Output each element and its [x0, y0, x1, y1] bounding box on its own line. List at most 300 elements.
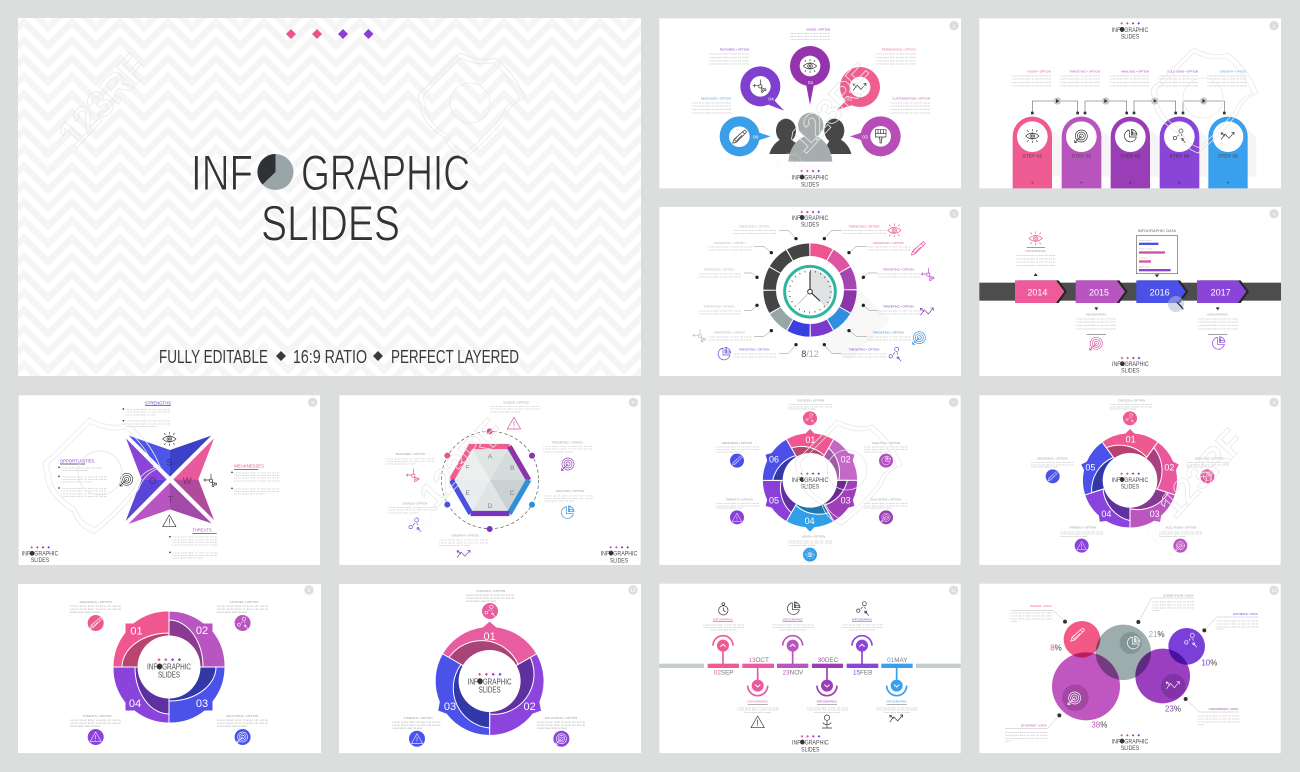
label 2 right: Lorem ipsum dolor sit amet elit sed do — [867, 249, 911, 252]
note 2014: Lorem ipsum dolor sit amet elit sed do — [1016, 261, 1056, 264]
bubble 03: 03 — [862, 134, 868, 140]
tagline: FULLY EDITABLE — [159, 347, 268, 367]
label: vision: Lorem ipsum dolor sit amet elit sed do — [789, 539, 833, 542]
note: top 2: Lorem ipsum dolor sit amet — [779, 628, 806, 631]
hexagon sectors — [448, 444, 532, 516]
label: solutions: SOLUTIONS • OPTION — [1167, 69, 1198, 73]
label: solutions: Lorem ipsum dolor sit amet elit sed do — [217, 719, 269, 722]
label 3 right: Lorem ipsum dolor sit amet elit sed do — [878, 272, 921, 275]
label: pink — [1011, 604, 1053, 623]
label 6 right: TARGETING • OPTION — [849, 348, 879, 352]
label 1 left — [733, 224, 777, 235]
block: weaknesses: Lorem ipsum dolor sit amet elit sed do — [234, 487, 280, 490]
label: choices: Lorem ipsum dolor sit amet elit sed do — [217, 608, 269, 611]
label: analysis: Lorem ipsum dolor sit amet elit sed do — [1186, 463, 1229, 466]
label: vision: VISION • OPTION — [1027, 69, 1051, 73]
label: threats: Lorem ipsum dolor sit amet — [392, 727, 423, 730]
segment numbers: 01 — [805, 435, 815, 445]
label: analysis: Lorem ipsum dolor sit amet elit sed do — [544, 494, 594, 497]
block: strengths: STRENGTHS — [145, 400, 171, 405]
block: strengths: Lorem ipsum dolor sit amet elit sed do — [126, 422, 171, 425]
label: threats: Lorem ipsum dolor sit amet elit sed do — [716, 504, 760, 507]
label: choice left — [388, 501, 437, 532]
percent labels: 23% — [1165, 704, 1181, 713]
page number: 8 — [1273, 400, 1276, 405]
page number: 1 — [953, 23, 956, 28]
segment numbers — [1085, 435, 1174, 519]
pin up 2 — [783, 636, 803, 664]
panel: slide 9 four-part ring — [18, 584, 321, 753]
label 2 left: Lorem ipsum dolor sit amet elit sed do — [708, 246, 752, 249]
icon: pie chart letter O — [257, 154, 294, 190]
page number — [628, 585, 638, 595]
segment numbers — [769, 435, 851, 526]
label: threats — [1060, 526, 1104, 553]
label: designing: Lorem ipsum dolor sit amet — [70, 611, 100, 614]
label: choices: Lorem ipsum dolor sit amet — [217, 611, 247, 614]
ring of six segments — [753, 428, 867, 532]
panel: slide 8 five-part ring — [979, 395, 1281, 565]
mini logo — [792, 735, 829, 753]
bubble 02 — [837, 67, 880, 110]
page number — [629, 398, 638, 407]
mini logo: INFOGRAPHIC — [792, 175, 828, 182]
people icon — [769, 113, 851, 162]
label: growth: GROWTH • OPTION — [1220, 69, 1247, 73]
note 2017 — [1198, 307, 1238, 349]
label: analysis — [864, 441, 908, 468]
label: vision: Lorem ipsum dolor sit amet elit sed do — [1012, 78, 1052, 81]
note 2015: Lorem ipsum dolor sit amet elit sed do — [1077, 317, 1117, 320]
note: bottom 2: INFOGRAPHIC — [817, 700, 837, 704]
label: growth: Lorem ipsum dolor sit amet elit sed do — [439, 539, 489, 542]
bubble 02: 02 — [847, 97, 852, 103]
block: opportunities: Lorem ipsum dolor sit amet elit sed do — [62, 490, 107, 493]
note 2014: INFOGRAPHIC — [1026, 249, 1046, 253]
label: choices: Lorem ipsum dolor sit amet elit sed do — [789, 405, 833, 408]
label: analysis: Lorem ipsum dolor sit amet elit sed do — [1110, 81, 1150, 84]
label: violet: ESTIMATE • DATA — [1233, 612, 1258, 616]
star segment O — [126, 438, 167, 521]
step 01: STEP 01 — [1022, 154, 1042, 160]
tagline — [159, 347, 519, 367]
label: solutions: Lorem ipsum dolor sit amet — [217, 725, 247, 728]
panel: slide 11 date timeline — [659, 584, 961, 753]
label: persevance: Lorem ipsum dolor sit amet elit sed do — [876, 63, 916, 66]
label: designing — [1031, 456, 1074, 483]
mini logo: INFOGRAPHIC — [1112, 27, 1148, 34]
label: magenta: Lorem — [1005, 740, 1012, 743]
note: top 2: INFOGRAPHIC — [783, 617, 803, 621]
label: designing: Lorem ipsum dolor sit amet elit sed do — [1031, 463, 1074, 466]
note: top 1: Lorem ipsum dolor sit amet elit sed do — [703, 624, 745, 627]
label 4 right: Lorem ipsum dolor sit amet elit sed do — [878, 312, 921, 315]
label: pink: Lorem ipsum dolor sit amet elit sed do — [1011, 617, 1053, 620]
label: choices: Lorem ipsum dolor sit amet — [466, 600, 496, 603]
mini logo: INFOGRAPHIC — [792, 215, 828, 222]
label: vision: Lorem ipsum dolor sit amet elit sed do — [790, 38, 831, 41]
label: designing: Lorem ipsum dolor sit amet — [1031, 466, 1058, 469]
block: threats: Lorem ipsum dolor sit amet elit sed do — [173, 536, 218, 539]
step 03 — [1111, 117, 1150, 188]
tagline: 16:9 RATIO — [293, 347, 367, 367]
label: solutions — [1159, 69, 1199, 87]
mini logo: INFOGRAPHIC — [1112, 739, 1148, 746]
label: solutions — [537, 716, 586, 747]
pin down 2 — [817, 667, 837, 696]
note: bottom 3: Lorem ipsum dolor sit amet elit sed do — [876, 706, 918, 709]
step 03: STEP 03 — [1120, 154, 1140, 160]
label: vision — [790, 28, 831, 41]
step 05 — [1208, 117, 1248, 188]
label: choice left: Lorem ipsum dolor sit amet elit sed do — [388, 509, 437, 512]
label: analysis: Lorem ipsum dolor sit amet — [544, 500, 575, 503]
label: vision: Lorem ipsum dolor sit amet elit sed do — [1012, 74, 1052, 77]
label 3 right: Lorem ipsum dolor sit amet elit sed do — [878, 275, 921, 278]
segment numbers: 02 — [1164, 462, 1174, 472]
data box 2016: Adipiscing — [1139, 265, 1150, 268]
center logo: INFOGRAPHIC — [147, 663, 191, 672]
label 1 right: Lorem ipsum dolor sit amet elit sed do — [843, 232, 887, 235]
label: vision: VISION • OPTION — [806, 28, 830, 32]
center logo: SLIDES — [158, 671, 180, 680]
label 6 right: Lorem ipsum dolor sit amet elit sed do — [843, 355, 887, 358]
block: opportunities: Lorem ipsum dolor sit amet elit sed do — [62, 478, 107, 481]
label: choices: CHOICES • OPTION — [797, 398, 824, 402]
label: designing: DESIGNING • OPTION — [722, 441, 752, 445]
segment numbers: 04 — [129, 698, 141, 710]
label: threats — [716, 497, 760, 524]
stock photo watermarks: 123RF — [51, 47, 157, 156]
label: choice left: Lorem ipsum dolor sit amet — [388, 511, 419, 514]
block: weaknesses: Lorem ipsum dolor sit amet elit sed do — [234, 477, 280, 480]
label: analysis — [1110, 69, 1150, 87]
mini logo: INFOGRAPHIC — [792, 740, 829, 747]
label: growth — [1207, 69, 1247, 87]
label: solutions: Lorem ipsum dolor sit amet elit sed do — [1159, 74, 1199, 77]
label: targeting — [1061, 69, 1101, 87]
percent labels: 38% — [1091, 721, 1107, 730]
label 5 right: Lorem ipsum dolor sit amet elit sed do — [867, 338, 911, 341]
label: threats: Lorem ipsum dolor sit amet elit sed do — [70, 719, 122, 722]
label: solutions: SOLUTIONS • OPTION — [871, 497, 901, 501]
arrow 2016: 2016 — [1150, 288, 1170, 298]
stock photo watermarks: 123RF — [411, 411, 512, 515]
mini logo: SLIDES — [801, 746, 820, 753]
arrow 2017: 2017 — [1211, 288, 1231, 298]
label: designing: Lorem ipsum dolor sit amet — [716, 450, 743, 453]
page number: 10 — [630, 588, 636, 594]
mini logo — [601, 546, 637, 564]
label: growth: Lorem ipsum dolor sit amet elit sed do — [1207, 81, 1247, 84]
label: targeting: TARGETING • OPTION — [552, 440, 583, 444]
shadow wedge — [817, 288, 890, 360]
note: top 3: Lorem ipsum dolor sit amet — [849, 628, 876, 631]
block: weaknesses: Lorem ipsum dolor sit amet — [234, 493, 265, 496]
label: choices: CHOICES • OPTION — [230, 600, 258, 604]
label 4 left — [698, 305, 741, 315]
label: solutions — [1159, 526, 1203, 553]
icons around star — [120, 432, 217, 527]
data box 2016 — [1136, 229, 1178, 277]
label: choice left: CHOICE • OPTION — [402, 501, 428, 505]
label: persevance: Lorem ipsum dolor sit amet elit sed do — [876, 53, 916, 56]
star segment S: S — [167, 457, 173, 467]
center logo: SLIDES — [1121, 484, 1140, 491]
stock photo watermarks — [43, 47, 1258, 544]
block: opportunities: Lorem ipsum dolor sit amet — [62, 469, 89, 472]
hexagon letters — [465, 453, 515, 510]
note 2014 — [1016, 232, 1056, 276]
block: threats: THREATS — [192, 528, 212, 533]
label: choices — [789, 398, 833, 425]
ring of five segments — [1072, 428, 1188, 539]
percent labels: 21% — [1149, 630, 1165, 639]
segment numbers: 04 — [805, 516, 815, 526]
center logo — [147, 658, 191, 680]
block: threats: Lorem ipsum dolor sit amet elit sed do — [173, 551, 218, 554]
note: bottom 1: Lorem ipsum dolor sit amet elit sed do — [737, 709, 779, 712]
bubble 03 — [850, 116, 901, 156]
four colored diamonds — [286, 29, 374, 39]
label: designing: Lorem ipsum dolor sit amet elit sed do — [692, 111, 732, 114]
page number: 12 — [1271, 588, 1277, 593]
label: solutions: Lorem ipsum dolor sit amet elit sed do — [217, 722, 269, 725]
block: strengths: Lorem ipsum dolor sit amet elit sed do — [126, 411, 171, 414]
date labels: 13OCT — [748, 657, 769, 664]
label: customization: Lorem ipsum dolor sit amet elit sed do — [891, 111, 931, 114]
title: INFOGRAPHIC SLIDES — [191, 145, 470, 252]
label: violet: Lorem — [1217, 628, 1224, 631]
label: purple: Lorem ipsum dolor sit amet elit sed do — [1198, 714, 1240, 717]
label: designing: Lorem ipsum dolor sit amet elit sed do — [1031, 461, 1074, 464]
label: choices: Lorem ipsum dolor sit amet — [1109, 408, 1136, 411]
block: weaknesses: Lorem ipsum dolor sit amet elit sed do — [234, 474, 280, 477]
label: choice top: CHOICE • OPTION — [503, 400, 529, 404]
label: features: FEATURES • OPTION — [396, 452, 425, 456]
label: solutions: Lorem ipsum dolor sit amet elit sed do — [1159, 78, 1199, 81]
note: top 3: INFOGRAPHIC — [852, 617, 872, 621]
label 3 left: Lorem ipsum dolor sit amet elit sed do — [698, 275, 741, 278]
label: threats: THREATS • OPTION — [725, 497, 753, 501]
note: top 1: Lorem ipsum dolor sit amet elit sed do — [703, 626, 745, 629]
label 1 left: Lorem ipsum dolor sit amet elit sed do — [733, 229, 777, 232]
label: magenta: Lorem ipsum dolor sit amet elit sed do — [1005, 737, 1048, 740]
label 5 left: Lorem ipsum dolor sit amet elit sed do — [708, 338, 752, 341]
label: targeting: Lorem ipsum dolor sit amet elit sed do — [1061, 78, 1101, 81]
panel: slide 3 clock ring — [659, 207, 961, 376]
page number — [949, 398, 958, 407]
label: threats: THREATS • OPTION — [1069, 526, 1096, 530]
note 2015: INFOGRAPHIC — [1086, 312, 1106, 316]
pin up 1 — [713, 636, 733, 664]
label: vision: Lorem ipsum dolor sit amet elit sed do — [1012, 84, 1052, 87]
label: designing: Lorem ipsum dolor sit amet elit sed do — [70, 605, 122, 608]
date labels: 23NOV — [783, 670, 804, 677]
hexagon letters: D — [488, 503, 493, 510]
label: features: Lorem ipsum dolor sit amet elit sed do — [709, 53, 749, 56]
label: solutions: Lorem ipsum dolor sit amet elit sed do — [864, 502, 908, 505]
label: threats: Lorem ipsum dolor sit amet — [1060, 535, 1087, 538]
page number — [1269, 398, 1279, 407]
label: solutions: Lorem ipsum dolor sit amet elit sed do — [1159, 81, 1199, 84]
label: choice top — [490, 400, 540, 429]
panel: slide 6 hexagon — [339, 395, 641, 565]
block: weaknesses: WEAKNESSES — [234, 463, 264, 468]
note: top 1: Lorem ipsum dolor sit amet — [710, 628, 737, 631]
note: top 1 — [703, 603, 745, 631]
label: violet: Lorem ipsum dolor sit amet elit sed do — [1217, 622, 1259, 625]
label: targeting: Lorem ipsum dolor sit amet elit sed do — [1061, 84, 1101, 87]
label: threats: Lorem ipsum dolor sit amet elit sed do — [70, 722, 122, 725]
note: bottom 1: Lorem ipsum dolor sit amet elit sed do — [737, 706, 779, 709]
label: violet: Lorem ipsum dolor sit amet elit sed do — [1217, 625, 1259, 628]
pin down 1 — [748, 667, 768, 696]
label: analysis: ANALYSIS • OPTION — [1121, 69, 1149, 73]
page number: 7 — [952, 400, 955, 405]
label: magenta: Lorem ipsum dolor sit amet elit sed do — [1005, 734, 1048, 737]
segment numbers: 05 — [1085, 462, 1095, 472]
note: top 3: Lorem ipsum dolor sit amet elit sed do — [842, 624, 883, 627]
label: choices: Lorem ipsum dolor sit amet elit sed do — [217, 605, 269, 608]
arrow 2016 — [1136, 280, 1188, 303]
block: weaknesses: Lorem ipsum dolor sit amet elit sed do — [234, 479, 280, 482]
star segment T — [128, 483, 212, 524]
note: bottom 3: INFOGRAPHIC — [887, 700, 907, 704]
label: gray — [1152, 593, 1195, 612]
block: opportunities: Lorem ipsum dolor sit amet — [62, 481, 92, 484]
label: growth: Lorem ipsum dolor sit amet elit sed do — [1207, 74, 1247, 77]
label: targeting — [543, 440, 593, 471]
note: top 3: Lorem ipsum dolor sit amet elit sed do — [842, 626, 883, 629]
label: persevance: Lorem ipsum dolor sit amet elit sed do — [876, 59, 916, 62]
label: designing: Lorem ipsum dolor sit amet elit sed do — [716, 446, 760, 449]
bubble 01: 01 — [808, 80, 814, 86]
page number — [949, 586, 958, 595]
label: choices: Lorem ipsum dolor sit amet elit sed do — [1109, 405, 1153, 408]
label: vision: Lorem ipsum dolor sit amet elit sed do — [790, 32, 831, 35]
segment numbers: 01 — [1126, 435, 1136, 445]
data box 2016: Consect — [1139, 256, 1147, 259]
segment numbers: 03 — [444, 701, 456, 713]
block: threats: Lorem ipsum dolor sit amet elit sed do — [173, 554, 218, 557]
page number: 5 — [311, 400, 314, 405]
step 05: STEP 05 — [1218, 154, 1238, 160]
label: choices: Lorem ipsum dolor sit amet elit sed do — [466, 594, 515, 597]
label: solutions: Lorem ipsum dolor sit amet elit sed do — [1159, 530, 1203, 533]
note 2014: Lorem ipsum dolor sit amet elit sed do — [1016, 254, 1056, 257]
block: weaknesses — [231, 463, 280, 496]
segment numbers: 06 — [769, 454, 779, 464]
label: customization: CUSTOMIZATION • OPTION — [892, 96, 930, 100]
label: designing: Lorem ipsum dolor sit amet elit sed do — [716, 448, 760, 451]
page number: 3 — [953, 211, 956, 216]
title: INFOGRAPHIC SLIDES: GRAPHIC — [301, 145, 470, 201]
percent labels: 10% — [1201, 658, 1217, 667]
block: threats: Lorem ipsum dolor sit amet elit sed do — [173, 541, 218, 544]
star segment W — [173, 438, 214, 520]
label: features — [709, 48, 749, 66]
label: persevance — [876, 48, 916, 66]
label: growth: Lorem ipsum dolor sit amet elit sed do — [1207, 84, 1247, 87]
label 6 left: TARGETING • OPTION — [739, 348, 769, 352]
label 4 left: Lorem ipsum dolor sit amet elit sed do — [698, 312, 741, 315]
segment numbers — [444, 631, 536, 713]
label: magenta: Lorem ipsum dolor sit amet elit sed do — [1005, 731, 1048, 734]
date labels — [714, 657, 908, 677]
segment numbers: 03 — [196, 698, 208, 710]
label 4 left: Lorem ipsum dolor sit amet elit sed do — [698, 309, 741, 312]
page number: 4 — [1273, 211, 1276, 216]
label: vision: Lorem ipsum dolor sit amet elit sed do — [789, 542, 833, 545]
bubbles — [1052, 621, 1205, 720]
label 3 right — [878, 268, 934, 281]
page number: 2 — [1273, 23, 1276, 28]
label: solutions: Lorem ipsum dolor sit amet — [1159, 535, 1186, 538]
panel: slide 12 bubble chart — [979, 584, 1281, 753]
step 02 — [1062, 116, 1101, 188]
label: vision: VISION • OPTION — [801, 535, 825, 539]
connectors with arrows — [1031, 97, 1226, 114]
mini logo — [792, 170, 828, 188]
title: INFOGRAPHIC SLIDES: INF — [191, 145, 253, 201]
label: solutions: SOLUTIONS • OPTION — [1166, 526, 1196, 530]
page number — [1269, 586, 1279, 595]
segment numbers — [129, 625, 208, 710]
label 1 right: Lorem ipsum dolor sit amet elit sed do — [843, 229, 887, 232]
data box 2016: INFOGRAPHIC DATA — [1138, 229, 1177, 233]
block: threats — [169, 528, 218, 560]
label 5 right — [867, 331, 925, 344]
segmented ring — [755, 235, 865, 345]
label 5 right: TARGETING • OPTION — [873, 331, 904, 335]
label: threats: Lorem ipsum dolor sit amet — [716, 507, 743, 510]
segment numbers: 03 — [841, 496, 851, 506]
label: choice left: Lorem ipsum dolor sit amet elit sed do — [388, 506, 437, 509]
label: threats: Lorem ipsum dolor sit amet elit sed do — [392, 721, 441, 724]
page number — [1269, 21, 1279, 30]
label: vision — [1012, 69, 1052, 87]
percent labels — [1050, 630, 1217, 730]
label: targeting: TARGETING • OPTION — [1069, 69, 1100, 73]
label: designing — [692, 96, 732, 114]
panel: slide 4 timeline — [979, 207, 1281, 376]
label: designing: DESIGNING • OPTION — [701, 96, 731, 100]
center logo: INFOGRAPHIC — [1112, 477, 1148, 484]
label: gray: Lorem ipsum dolor sit amet elit sed do — [1152, 603, 1195, 606]
label: features: Lorem ipsum dolor sit amet elit sed do — [386, 460, 435, 463]
hexagon letters: E — [465, 490, 470, 497]
label: analysis: ANALYSIS • OPTION — [556, 489, 584, 493]
mini logo: SLIDES — [1121, 745, 1140, 752]
segment numbers: 02 — [196, 625, 208, 637]
label: growth — [439, 534, 489, 557]
title: INFOGRAPHIC SLIDES: SLIDES — [261, 196, 400, 252]
note: bottom 1 — [737, 700, 779, 728]
stock photo watermarks: 123RF — [781, 56, 882, 160]
label: threats: Lorem ipsum dolor sit amet elit sed do — [392, 724, 441, 727]
note: bottom 3: Lorem ipsum dolor sit amet elit sed do — [876, 709, 918, 712]
mini logo: INFOGRAPHIC — [1112, 361, 1149, 368]
center logo — [792, 472, 828, 491]
label 4 right: Lorem ipsum dolor sit amet elit sed do — [878, 309, 921, 312]
label: gray: Lorem ipsum dolor sit amet elit sed do — [1152, 600, 1195, 603]
label: choices: Lorem ipsum dolor sit amet — [789, 408, 816, 411]
label: vision: Lorem ipsum dolor sit amet elit sed do — [1012, 81, 1052, 84]
label 4 left: TARGETING • OPTION — [704, 305, 734, 309]
label: gray: Lorem ipsum dolor sit amet elit sed do — [1152, 606, 1195, 609]
arrow 2014: 2014 — [1027, 288, 1047, 298]
